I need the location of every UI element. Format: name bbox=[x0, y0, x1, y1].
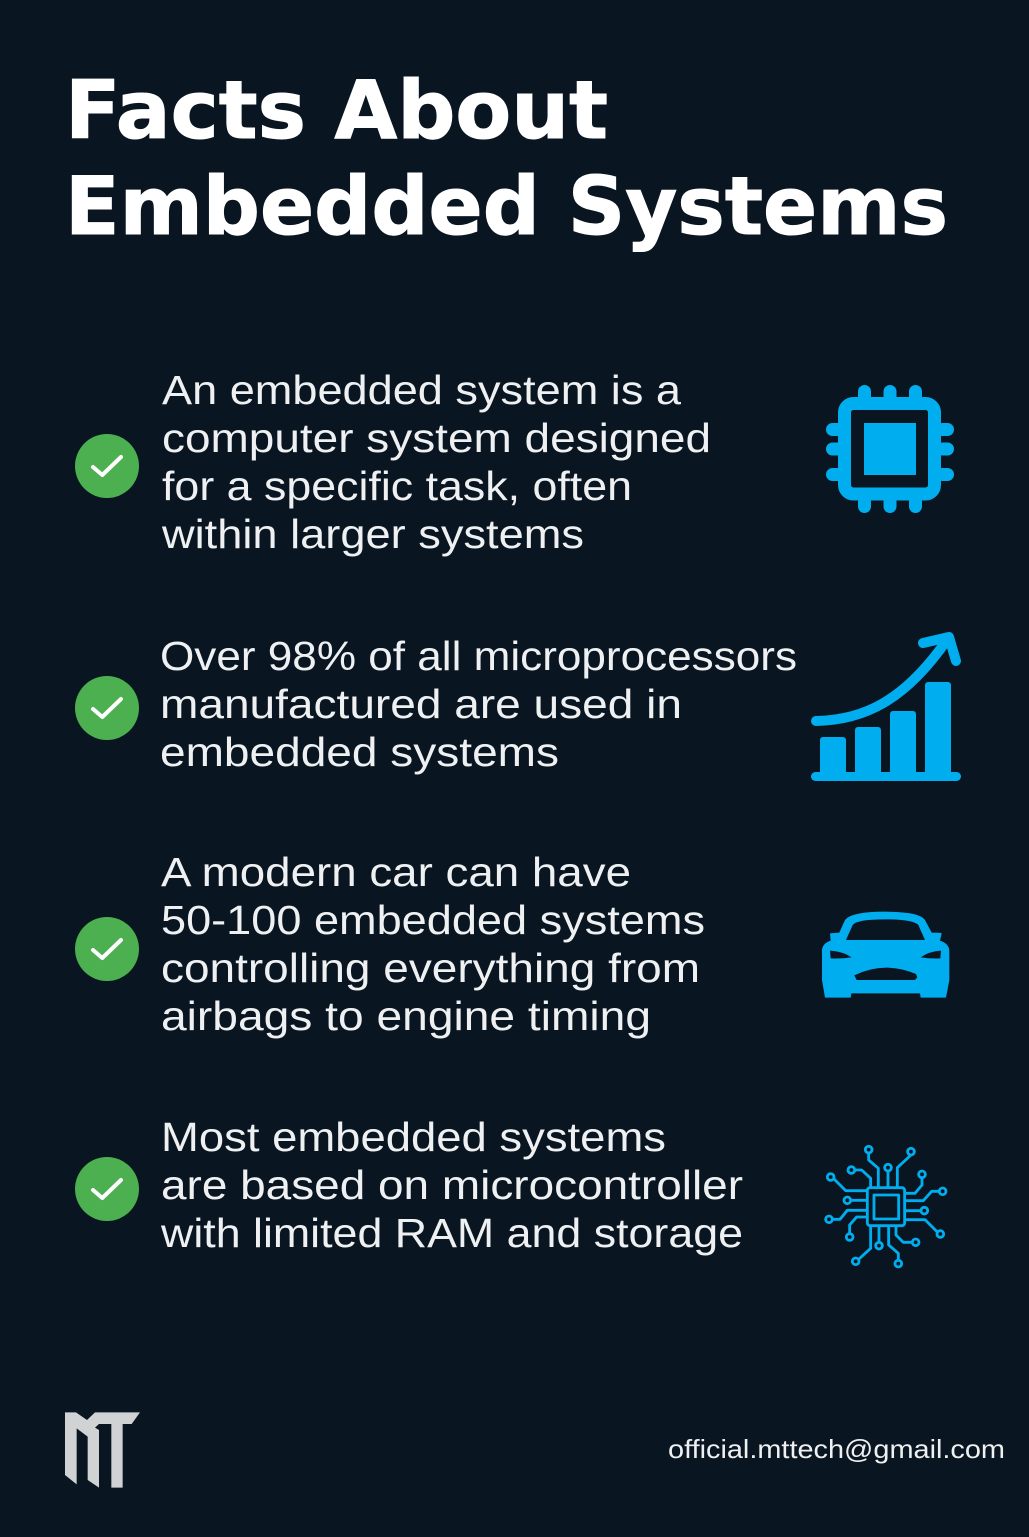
panel: fact 4 bbox=[75, 1114, 946, 1267]
logo: MT bbox=[65, 1412, 140, 1488]
icon: check badge 4 bbox=[75, 1157, 139, 1221]
text: fact 2 bbox=[160, 633, 797, 775]
text: fact 3: 50-100 embedded systems bbox=[161, 897, 705, 943]
icon: check badge 2 bbox=[75, 676, 139, 740]
title: Embedded Systems bbox=[65, 160, 948, 253]
icon: check badge 1 bbox=[75, 434, 139, 498]
text: fact 4: are based on microcontroller bbox=[161, 1162, 743, 1208]
text: fact 2: embedded systems bbox=[160, 729, 559, 775]
panel: fact 2 bbox=[75, 633, 961, 781]
text: fact 1: within larger systems bbox=[161, 511, 584, 557]
text: fact 2: manufactured are used in bbox=[160, 681, 682, 727]
icon: car bbox=[822, 912, 949, 998]
text: fact 3 bbox=[161, 849, 705, 1039]
icon: circuit processor bbox=[826, 1146, 946, 1267]
icon: check badge 3 bbox=[75, 917, 139, 981]
text: fact 3: A modern car can have bbox=[161, 849, 631, 895]
text: fact 1: computer system designed bbox=[162, 415, 711, 461]
contact email: official.mttech@gmail.com bbox=[668, 1434, 1005, 1464]
icon: growth chart bbox=[811, 637, 961, 781]
text: fact 4 bbox=[160, 1114, 743, 1256]
title bbox=[65, 64, 948, 253]
title: Facts About bbox=[65, 64, 608, 157]
panel: fact 3 bbox=[75, 849, 949, 1039]
icon: microchip bbox=[826, 385, 954, 513]
text: fact 1 bbox=[161, 367, 711, 557]
text: fact 1: An embedded system is a bbox=[162, 367, 682, 413]
panel: fact 1 bbox=[75, 367, 954, 557]
text: fact 3: controlling everything from bbox=[161, 945, 700, 991]
text: fact 4: with limited RAM and storage bbox=[160, 1210, 743, 1256]
text: fact 2: Over 98% of all microprocessors bbox=[160, 633, 797, 679]
text: fact 4: Most embedded systems bbox=[161, 1114, 666, 1160]
text: fact 3: airbags to engine timing bbox=[161, 993, 651, 1039]
text: fact 1: for a specific task, often bbox=[162, 463, 632, 509]
